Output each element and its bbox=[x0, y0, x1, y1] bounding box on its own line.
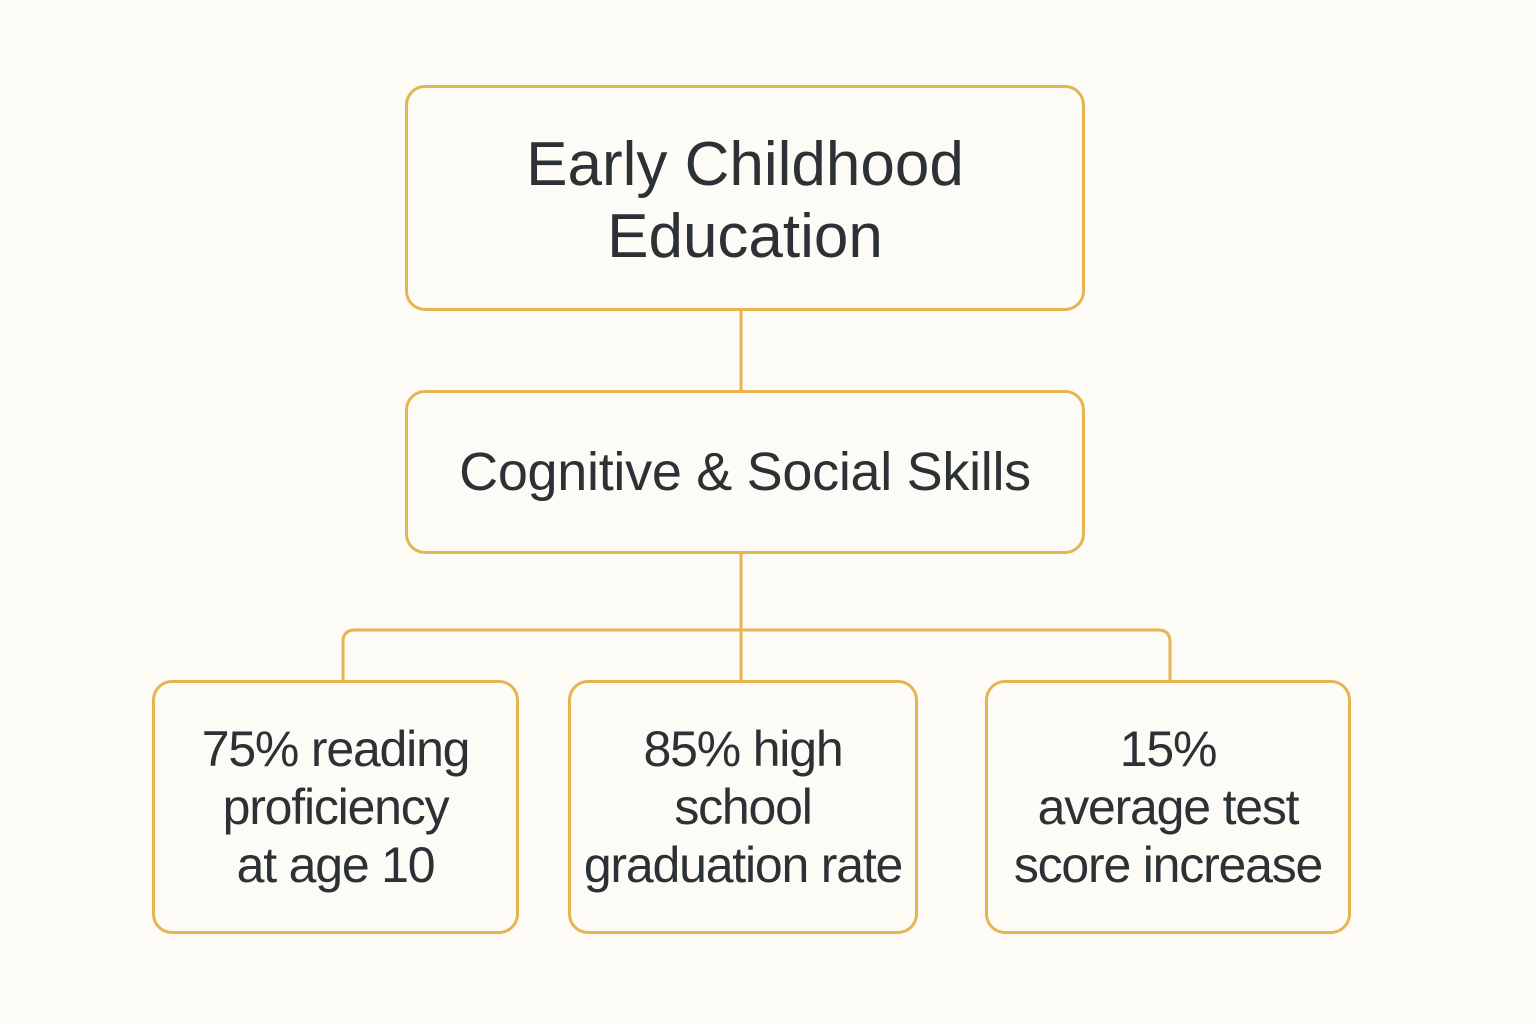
outcome box: graduation rate: graduation rate bbox=[584, 837, 902, 893]
outcome box: reading proficiency: proficiency bbox=[223, 779, 448, 835]
outcome box: test score increase bbox=[985, 680, 1351, 934]
title box: Early Childhood Education: Education bbox=[607, 202, 883, 271]
outcome box: test score increase: 15% bbox=[1120, 721, 1216, 777]
middle box: Cognitive & Social Skills bbox=[405, 390, 1085, 554]
outcome box: reading proficiency: at age 10 bbox=[237, 837, 434, 893]
outcome box: reading proficiency: 75% reading bbox=[202, 721, 469, 777]
middle box: Cognitive & Social Skills: Cognitive & Social Skills bbox=[459, 442, 1031, 502]
outcome box: test score increase: score increase bbox=[1014, 837, 1322, 893]
outcome box: test score increase: average test bbox=[1038, 779, 1298, 835]
outcome box: graduation rate bbox=[568, 680, 918, 934]
title box: Early Childhood Education bbox=[405, 85, 1085, 311]
title box: Early Childhood Education: Early Childhood bbox=[526, 130, 964, 199]
outcome box: reading proficiency bbox=[152, 680, 519, 934]
outcome box: graduation rate: 85% high bbox=[644, 721, 842, 777]
outcome box: graduation rate: school bbox=[674, 779, 812, 835]
